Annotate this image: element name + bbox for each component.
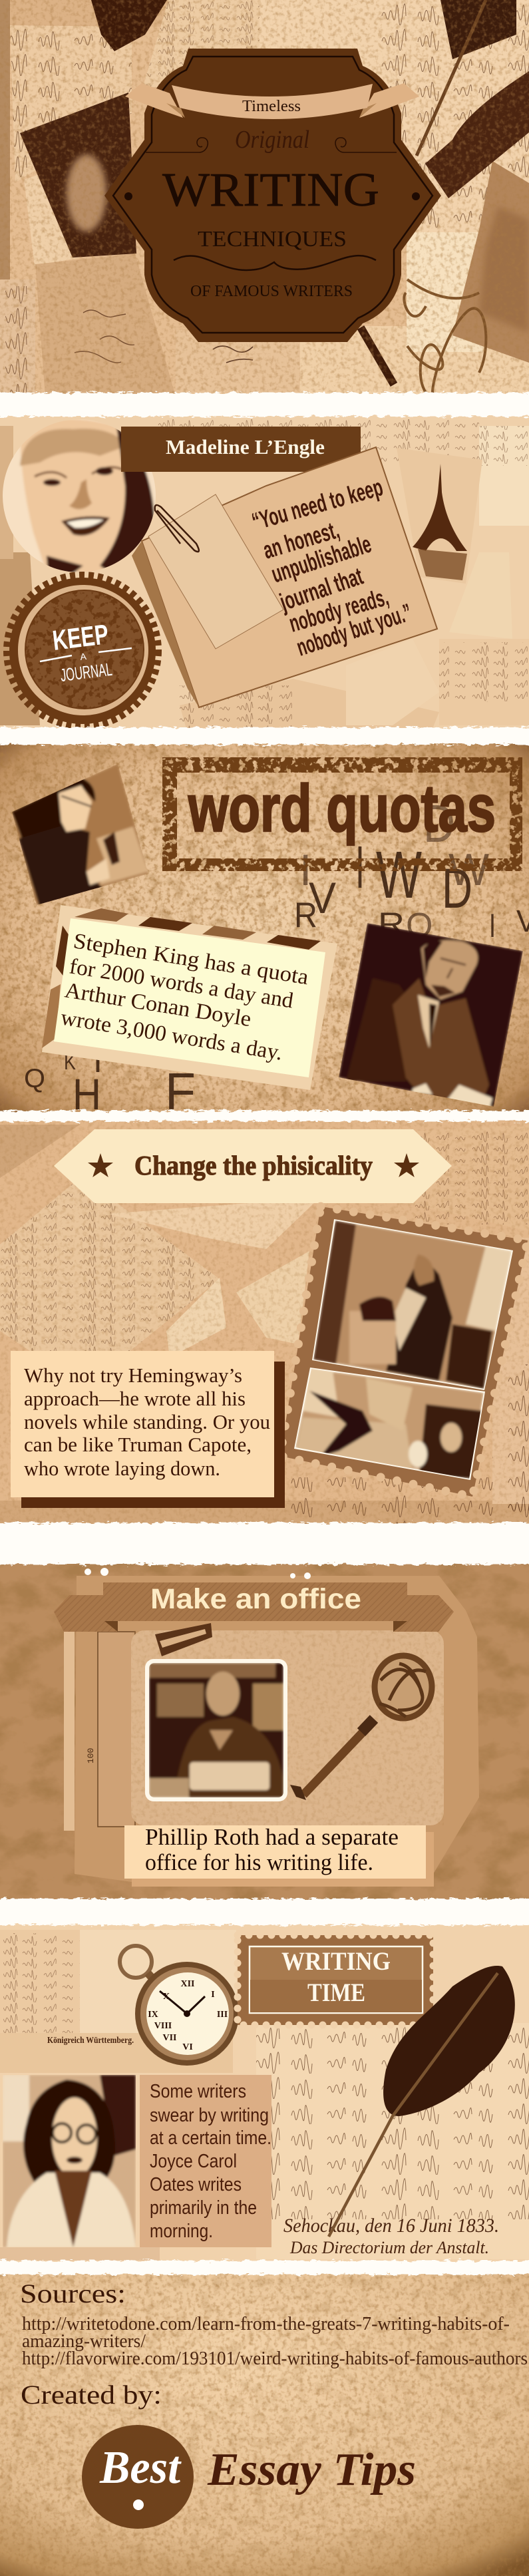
- scattered letters: F: [165, 1062, 196, 1121]
- panel: make an office: [0, 1557, 529, 1907]
- quote text: “You need to keep: [249, 473, 386, 536]
- card text: for 2000 words a day and: [68, 954, 295, 1013]
- banner: change the phisicality: [54, 1129, 452, 1203]
- scattered letters: W: [448, 844, 489, 895]
- pocket watch: III: [217, 2010, 228, 2020]
- panel: change the physicality: [0, 1115, 529, 1531]
- text box: writing time: Joyce Carol: [150, 2151, 237, 2172]
- caption: Philip Roth: office for his writing life.: [145, 1849, 373, 1875]
- quote text: an honest,: [260, 516, 342, 564]
- quote text: nobody but you.”: [293, 598, 415, 661]
- logo: Best Essay Tips: Best: [99, 2442, 182, 2493]
- logo: Best Essay Tips: Essay Tips: [207, 2444, 416, 2495]
- photo: Capote laying down: [295, 1368, 484, 1479]
- text box: Hemingway and Capote: who wrote laying down.: [24, 1457, 220, 1480]
- parchment background: [0, 2269, 529, 2576]
- stamp: keep a journal: A: [79, 651, 87, 662]
- text box: writing time: Oates writes: [150, 2174, 242, 2195]
- name banner: [121, 427, 361, 472]
- badge ribbon: [125, 83, 419, 119]
- letters background: Das Directorium der Anstalt.: [289, 2238, 489, 2257]
- scattered letters: Q: [24, 1064, 45, 1093]
- banner: change the phisicality: Change the phisicality: [134, 1150, 373, 1181]
- text box: writing time: at a certain time.: [150, 2127, 271, 2149]
- card text: Arthur Conan Doyle: [63, 978, 253, 1031]
- pocket watch: VIII: [154, 2021, 172, 2031]
- panel: title hero: [0, 0, 529, 399]
- name banner: Madeline L’Engle: [166, 435, 325, 459]
- pocket watch: [120, 1946, 239, 2066]
- badge title text: WRITING: [162, 163, 379, 216]
- card text: wrote 3,000 words a day.: [59, 1006, 284, 1065]
- caption: Philip Roth: [124, 1824, 434, 1887]
- callout card: [42, 905, 337, 1090]
- stamp: keep a journal: KEEP: [51, 618, 110, 656]
- pocket watch: XII: [180, 1979, 195, 1989]
- badge title text: OF FAMOUS WRITERS: [190, 283, 353, 300]
- text box: writing time: Some writers: [150, 2081, 246, 2102]
- panel: writing time: [0, 1920, 529, 2266]
- badge title text: Original: [235, 126, 309, 154]
- letters background: Königreich Württemberg.: [47, 2036, 134, 2046]
- sources text: http://writetodone.com/learn-from-the-greats-7-writing-habits-of-: [22, 2314, 510, 2334]
- scattered letters: H: [73, 1069, 101, 1119]
- scattered letters: I: [355, 834, 365, 901]
- scattered letters: K: [64, 1050, 76, 1074]
- background: vintage letters and photos: [0, 0, 529, 399]
- sources text: Created by:: [21, 2380, 162, 2410]
- panel: word quotas: [0, 735, 529, 1121]
- stamp: writing time: WRITING: [281, 1947, 391, 1976]
- card text: [59, 929, 310, 1065]
- scattered letters: I: [299, 845, 311, 894]
- stamp: writing time: TIME: [307, 1978, 365, 2007]
- sources text: amazing-writers/: [22, 2331, 146, 2352]
- sources text: http://flavorwire.com/193101/weird-writing-habits-of-famous-authors: [22, 2348, 528, 2369]
- text box: Hemingway and Capote: approach—he wrote all his: [24, 1387, 246, 1410]
- photo: Arthur Conan Doyle: [339, 923, 523, 1110]
- letters background: [0, 1920, 529, 2266]
- quote text: unpublishable: [268, 530, 375, 588]
- scattered letters: I: [93, 1044, 102, 1079]
- stamp frame with photos: [280, 1206, 528, 1497]
- scattered letters: R: [378, 907, 405, 942]
- text box: writing time: [140, 2075, 271, 2247]
- open journal with quote: [132, 447, 437, 707]
- scattered letters: R: [294, 896, 317, 935]
- photo: Joyce Carol Oates: [3, 2075, 136, 2247]
- parchment background: [0, 735, 529, 1118]
- sources text: [20, 2279, 528, 2410]
- pocket watch: VII: [162, 2033, 177, 2043]
- scattered letters: W: [376, 838, 422, 912]
- icon: feather quill: [329, 1966, 515, 2237]
- text box: Hemingway and Capote: can be like Truman Capote,: [24, 1433, 252, 1456]
- scattered letters: I: [489, 907, 496, 944]
- badge: [104, 49, 441, 342]
- paper clip: [155, 505, 199, 552]
- text box: Hemingway and Capote: [11, 1351, 285, 1508]
- scattered letters: V: [309, 873, 336, 922]
- photo: Stephen King: [12, 764, 148, 908]
- scattered letters: D: [442, 857, 472, 920]
- stamp: writing time: [238, 1935, 433, 2025]
- heading ribbon: Make an office: [150, 1583, 361, 1615]
- pocket watch: IX: [148, 2010, 158, 2020]
- text box: writing time: morning.: [150, 2221, 213, 2242]
- quote text: nobody reads,: [286, 583, 391, 638]
- panel: Madeline L'Engle: [0, 413, 529, 735]
- icon: ornate key: [290, 1656, 432, 1800]
- badge title text: TECHNIQUES: [198, 227, 347, 252]
- badge ribbon: Timeless: [242, 98, 301, 115]
- heading frame: [162, 757, 522, 871]
- pocket watch: I: [211, 1990, 215, 2000]
- stamp: keep a journal: JOURNAL: [59, 659, 113, 685]
- text box: Hemingway and Capote: Why not try Hemingway’s: [24, 1364, 242, 1387]
- stamp: keep a journal: [7, 575, 158, 727]
- card text: Stephen King has a quota: [72, 929, 310, 990]
- heading ribbon: [54, 1582, 454, 1632]
- quote text: journal that: [276, 562, 367, 616]
- torn white gaps between panels: [0, 393, 529, 2275]
- postcard: Eiffel tower: [397, 448, 482, 584]
- logo: Best Essay Tips: [82, 2425, 416, 2529]
- caption: Philip Roth: Phillip Roth had a separate: [145, 1824, 399, 1850]
- panel: sources and credits: [0, 2269, 529, 2576]
- text box: writing time: primarily in the: [150, 2197, 257, 2219]
- pocket watch: X: [163, 1992, 170, 2002]
- photo: Madeline L'Engle portrait: [3, 419, 156, 572]
- envelopes background: [0, 1115, 529, 1531]
- photo: Hemingway standing: [313, 1220, 512, 1389]
- photo: Philip Roth: [145, 1659, 287, 1801]
- sources text: Sources:: [20, 2279, 126, 2308]
- scattered letters: D: [423, 794, 455, 853]
- text box: writing time: swear by writing: [150, 2105, 269, 2126]
- text box: Hemingway and Capote: novels while standing. Or you: [24, 1410, 270, 1433]
- quote text: [249, 473, 415, 661]
- scattered letters: O: [406, 906, 433, 945]
- pocket watch: VI: [182, 2042, 193, 2052]
- scattered letters: [24, 794, 529, 1121]
- kraft paper background: 100: [86, 1748, 96, 1763]
- background postcards: [0, 413, 529, 735]
- kraft paper background: [0, 1557, 529, 1907]
- letters background: Sehockau, den 16 Juni 1833.: [283, 2215, 499, 2237]
- badge title text: [162, 126, 379, 300]
